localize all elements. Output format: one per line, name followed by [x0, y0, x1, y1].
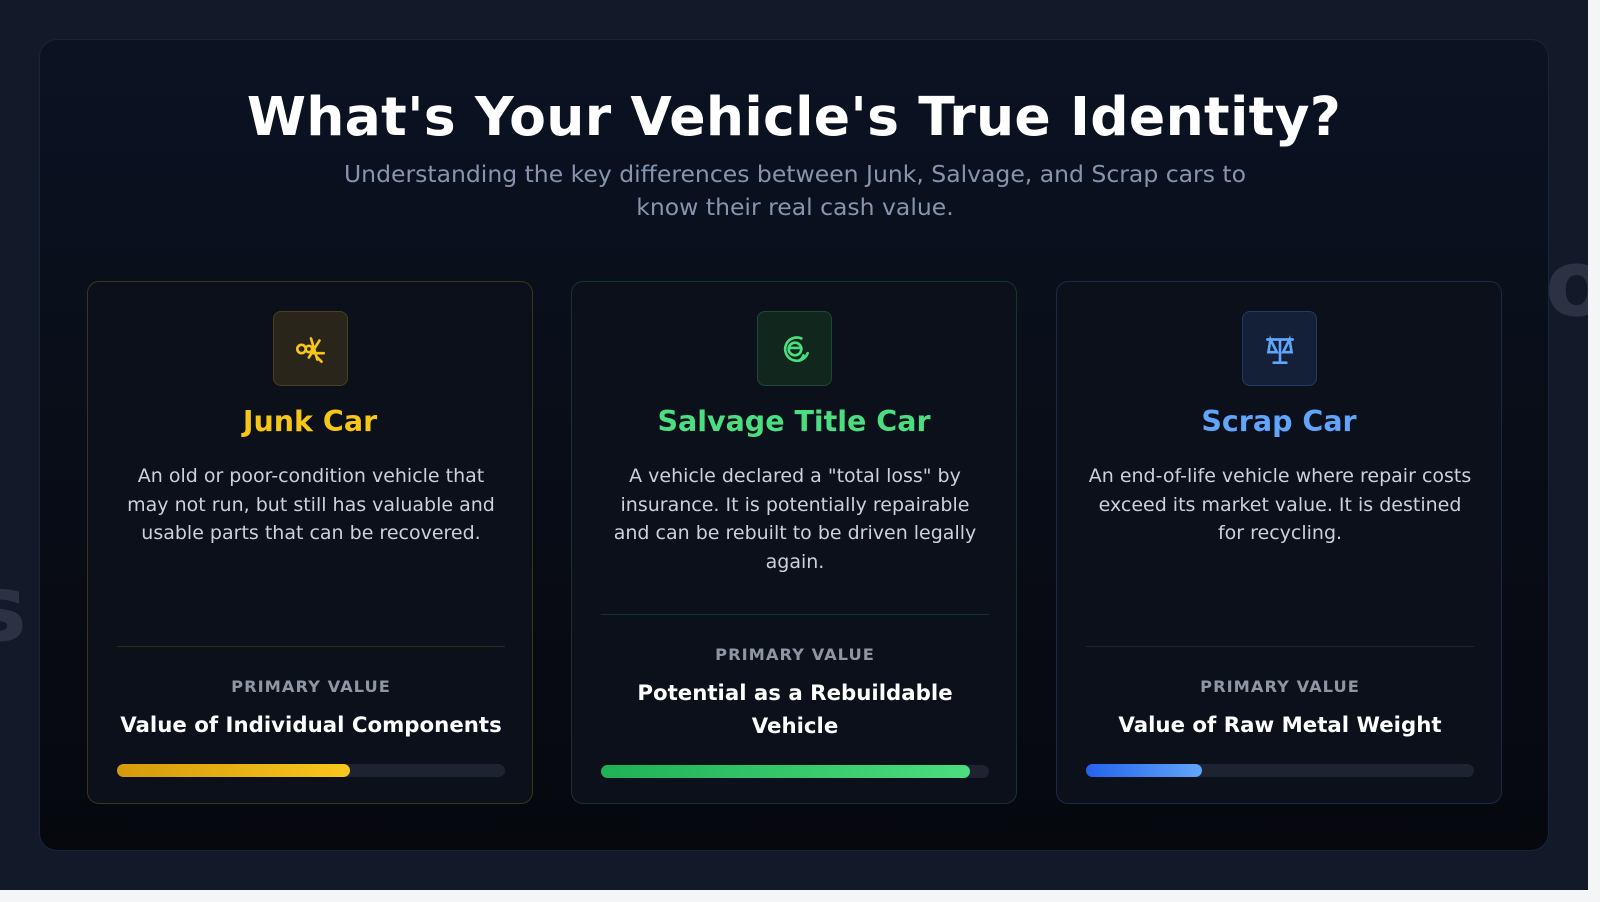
panel: scrap: [1056, 281, 1502, 804]
heading: Junk Car: [243, 405, 377, 438]
subtitle: Understanding the key differences between Junk, Salvage, and Scrap cars to know their real cash value.: [344, 160, 1246, 221]
icon: salvage: [757, 311, 832, 386]
value section: [117, 646, 505, 777]
icon: junk: [273, 311, 348, 386]
value section: PRIMARY VALUE: [1200, 677, 1360, 696]
panel: junk car: [87, 281, 533, 804]
description: An old or poor-condition vehicle that may not run, but still has valuable and usable parts that can be recovered.: [127, 465, 495, 544]
value section: [601, 614, 989, 778]
value section: PRIMARY VALUE: [715, 645, 875, 664]
description: An end-of-life vehicle where repair costs exceed its market value. It is destined for recycling.: [1089, 465, 1471, 544]
title: What's Your Vehicle's True Identity?: [247, 85, 1341, 148]
bar: [601, 765, 989, 778]
value section: Value of Individual Components: [120, 713, 502, 738]
bar: [1086, 764, 1474, 777]
heading: Scrap Car: [1201, 405, 1357, 438]
value section: Potential as a Rebuildable Vehicle: [637, 681, 953, 739]
description: A vehicle declared a "total loss" by insurance. It is potentially repairable and can be rebuilt to be driven legally again.: [614, 465, 976, 572]
value section: Value of Raw Metal Weight: [1118, 713, 1442, 738]
icon: scrap: [1242, 311, 1317, 386]
heading: Salvage Title Car: [657, 405, 931, 438]
panel: salvage: [571, 281, 1017, 804]
value section: PRIMARY VALUE: [231, 677, 391, 696]
bar: [117, 764, 505, 777]
value section: [1086, 646, 1474, 777]
